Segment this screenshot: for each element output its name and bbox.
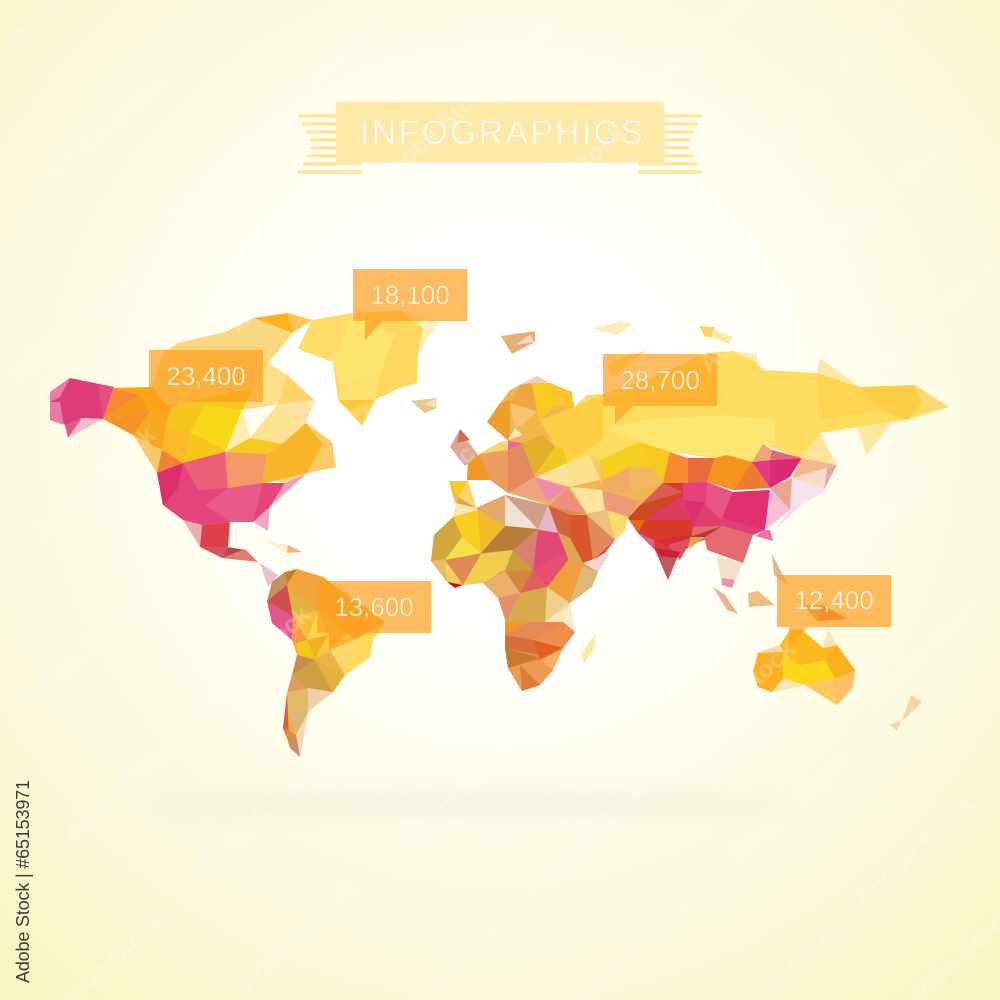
stock watermark pattern: Adobe Stock [829,125,961,249]
callout 13,600: 13,600 [334,592,414,622]
stock watermark pattern: Adobe Stock [694,254,826,378]
ground shadow [150,794,790,816]
India base [628,483,693,580]
stock watermark pattern: Adobe Stock [724,745,856,869]
stock watermark pattern: Adobe Stock [519,775,651,899]
stock watermark pattern: Adobe Stock [359,430,491,554]
Middle East and central Asia [550,488,587,514]
Australia and Oceania [753,605,922,731]
callout 23,400: 23,400 [166,361,246,391]
South America base [267,569,385,757]
Africa [431,481,610,691]
stock watermark pattern: Adobe Stock [184,765,316,889]
Eurasia [450,351,949,588]
South East Asia [690,526,722,537]
callout 23,400 [149,350,263,420]
callout 18,100 [353,269,467,340]
India [640,483,683,505]
ribbon panel [336,102,664,162]
stock watermark pattern: Adobe Stock [39,65,171,189]
stock watermark pattern: Adobe Stock [29,420,161,544]
stock watermark pattern: Adobe Stock [344,605,476,729]
Europe [510,383,537,410]
title ribbon [298,102,702,174]
stock watermark pattern: Adobe Stock [14,595,146,719]
stock watermark pattern: Adobe Stock [184,600,316,724]
Europe and Middle East base [467,376,670,563]
world map [50,310,949,757]
Greenland [298,310,438,426]
stock watermark pattern: Adobe Stock [834,440,966,564]
East Asia [683,482,770,535]
callout 12,400: 12,400 [794,585,874,615]
callout 13,600 [317,581,431,652]
stock watermark pattern: Adobe Stock [59,725,191,849]
stock watermark pattern: Adobe Stock [549,590,681,714]
stock watermark pattern: Adobe Stock [499,118,631,242]
stock watermark pattern: Adobe Stock [704,83,836,207]
Africa north and central base [431,481,610,691]
North America [50,313,336,562]
stock watermark pattern: Adobe Stock [224,215,356,339]
stock watermark pattern: Adobe Stock [4,265,136,389]
stock watermark pattern: Adobe Stock [369,70,501,194]
Indonesia islands [713,554,788,614]
arctic islands [411,321,733,413]
southern Africa base [505,622,575,691]
callout 12,400 [777,575,891,646]
callout 28,700: 28,700 [620,365,700,395]
stock watermark pattern: Adobe Stock [541,242,673,366]
stock watermark pattern: Adobe Stock [849,790,981,914]
side credit text: Adobe Stock | #65153971 [13,780,33,983]
ribbon right stripes [638,114,702,174]
stock watermark pattern: Adobe Stock [164,108,296,232]
callout 28,700 [603,354,717,424]
callout 18,100: 18,100 [370,280,450,310]
title: INFOGRAPHICS [360,114,643,152]
ribbon left stripes [298,114,362,174]
stock watermark pattern: Adobe Stock [234,875,366,999]
stock watermark pattern: Adobe Stock [669,635,801,759]
South America [260,563,385,757]
stock watermark pattern: Adobe Stock [859,590,991,714]
stock watermark pattern: Adobe Stock [389,735,521,859]
